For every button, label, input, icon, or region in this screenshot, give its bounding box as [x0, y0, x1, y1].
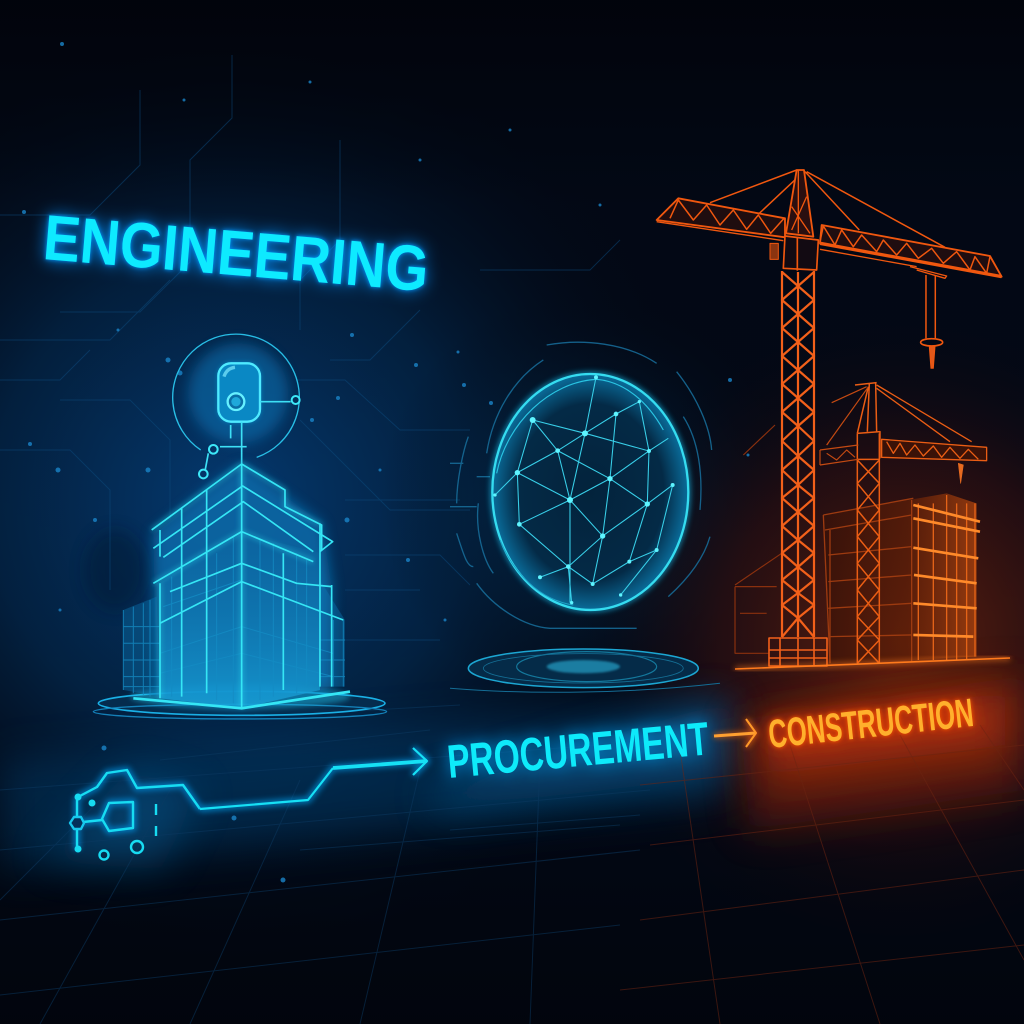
- tower crane mast: [769, 271, 827, 666]
- building: engineering wireframe: [123, 464, 350, 708]
- floor grid: [0, 705, 1024, 1024]
- arrow: procurement to construction: [714, 719, 756, 747]
- tower crane: [657, 170, 1002, 368]
- platform under globe: [450, 649, 720, 692]
- icon: sensor in circle: [173, 334, 300, 478]
- ground line: construction: [735, 658, 1010, 669]
- circuit background pattern: [0, 55, 620, 640]
- title: Engineering: ENGINEERING: [41, 201, 431, 305]
- title: Engineering: ENGINEERING: [41, 201, 431, 305]
- label: Procurement: [445, 711, 711, 788]
- label: Construction: [766, 691, 976, 757]
- platform under building: [93, 685, 387, 719]
- small crane and building: construction: [735, 383, 987, 663]
- title: Engineering: ENGINEERING: [41, 201, 431, 305]
- label: Procurement: PROCUREMENT: [445, 711, 711, 788]
- arrow: engineering to procurement: [200, 748, 427, 809]
- label: Procurement: PROCUREMENT: [445, 711, 711, 788]
- particles: [22, 42, 750, 882]
- globe network: [450, 342, 712, 628]
- circuit icon: [70, 770, 200, 860]
